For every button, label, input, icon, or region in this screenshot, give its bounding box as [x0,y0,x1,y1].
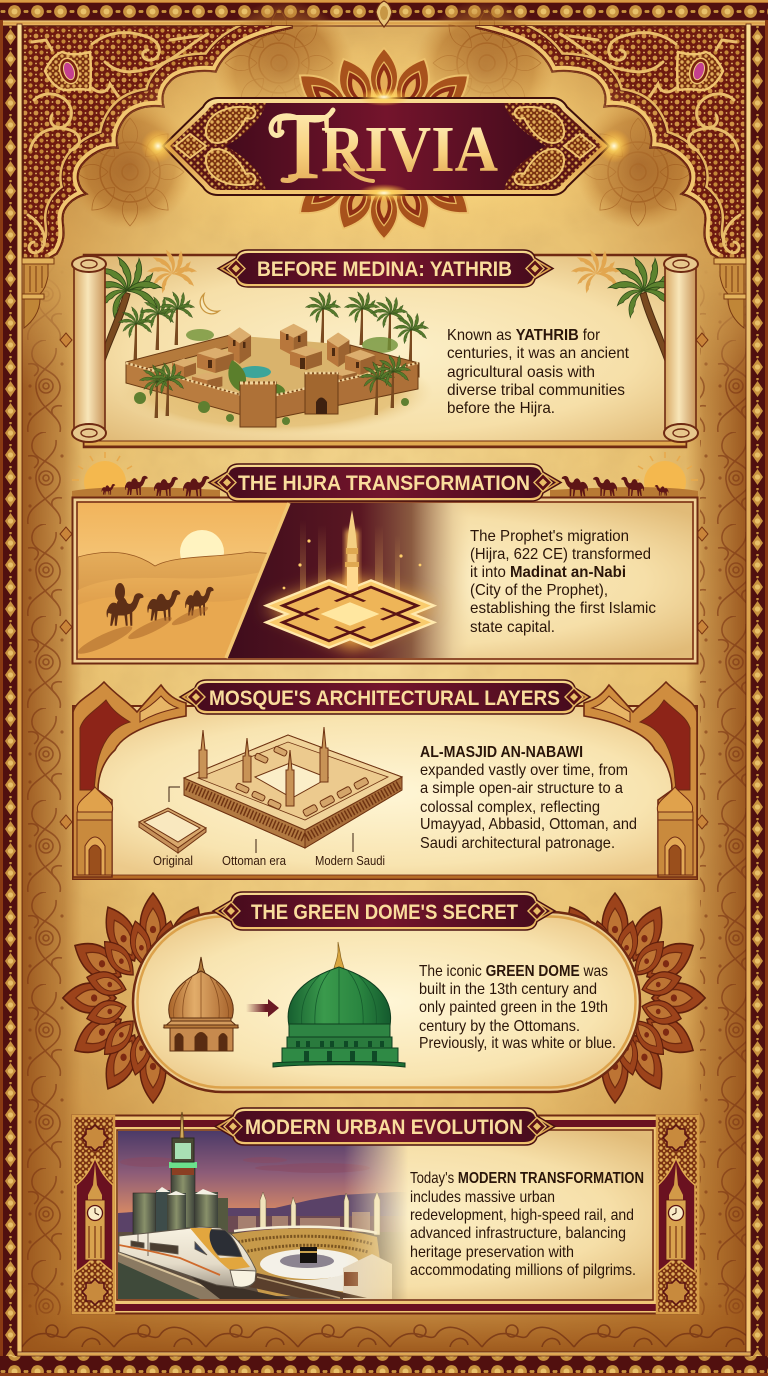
heading plaque: MODERN URBAN EVOLUTION [245,1116,523,1139]
side diamond markers [60,333,708,829]
text: mosque description: a simple open-air structure to a [420,780,623,797]
title banner [94,31,674,261]
heading plaque: THE HIJRA TRANSFORMATION [238,472,530,495]
text: Hijra description: it into Madinat an-Nabi [470,564,626,581]
title text [271,92,498,199]
title text: RIVIA [321,113,498,186]
text: Hijra description: The Prophet's migration [470,528,629,545]
text: modern transformation description: accommodating millions of pilgrims. [410,1262,636,1279]
text: mosque description: Umayyad, Abbasid, Ottoman, and [420,816,637,833]
text: green dome description: The iconic GREEN DOME was [419,963,608,980]
text: Yathrib description: agricultural oasis with [447,364,595,381]
text: mosque description [420,744,637,852]
heading plaque [218,250,553,287]
mountains [118,1192,404,1232]
text: Yathrib description: diverse tribal communities [447,382,625,399]
text: green dome description: Previously, it was white or blue. [419,1035,616,1052]
heading plaque [209,464,561,501]
heading plaque [213,892,555,930]
heading plaque: BEFORE MEDINA: YATHRIB [257,258,512,281]
scroll rollers [72,256,698,442]
leader lines [169,787,353,853]
suns and camel caravans [72,452,698,503]
right ornamental column [657,1116,698,1313]
text: Hijra description: (Hijra, 622 CE) transformed [470,546,651,563]
distant minarets and city [238,1212,370,1232]
heading plaque: MOSQUE'S ARCHITECTURAL LAYERS [209,687,560,710]
dark panel with glowing plan [226,503,470,658]
text: Hijra description: establishing the first Islamic [470,600,656,617]
clock tower spire [180,1112,184,1138]
faint mandalas behind the arch [66,0,702,229]
text: mosque description: expanded vastly over time, from [420,762,628,779]
text: Hijra description [470,528,656,636]
labels: Modern Saudi [315,853,385,868]
illustration: Makkah skyline, Kaaba and train [118,1131,408,1299]
text: Hijra description: state capital. [470,619,555,636]
text: Yathrib description: centuries, it was an ancient [447,345,630,362]
labels [153,853,385,868]
text: green dome description [419,963,616,1052]
fort buildings [172,324,375,390]
labels: Ottoman era [222,853,287,868]
heading plaque [180,680,590,714]
text: modern transformation description: advanced infrastructure, balancing [410,1225,626,1242]
text: modern transformation description: Today's MODERN TRANSFORMATION [410,1170,644,1187]
left ornamental column [73,1116,114,1313]
labels: Original [153,853,193,868]
ground behind [118,1232,408,1299]
text: green dome description: built in the 13th century and [419,981,597,998]
icon: green dome [273,942,405,1067]
paisley ornaments [175,107,595,185]
text: Yathrib description: Known as YATHRIB for [447,327,601,344]
lotus ornament above and below [269,48,499,239]
icon: palm trees [93,248,677,364]
arrow [246,999,279,1017]
panel: Hijra transformation [72,452,698,664]
icon: original brown dome [164,957,238,1051]
text: Yathrib description: before the Hijra. [447,400,555,417]
left arch with pavilion [73,682,186,877]
Grand Mosque and Kaaba [232,1227,392,1299]
tracks [118,1254,220,1299]
panel: before Medina [72,248,698,447]
illustration: desert caravan [75,503,293,660]
heading plaque: THE GREEN DOME'S SECRET [251,901,518,924]
illustration: walled oasis fort [113,291,433,436]
heading plaque [215,1108,555,1145]
icon: original small enclosure [139,808,206,853]
text: green dome description: century by the Ottomans. [419,1018,580,1035]
text: Yathrib description [447,327,630,417]
title text: T [276,92,330,199]
panel: modern urban evolution [72,1108,698,1314]
text: mosque description: AL-MASJID AN-NABAWI [420,744,583,761]
right arch with pavilion [584,682,697,877]
side mandalas [63,893,705,1103]
panel: green dome secret [63,892,705,1103]
text: Hijra description: (City of the Prophet), [470,582,608,599]
text: green dome description: only painted green in the 19th [419,999,608,1016]
text: modern transformation description [410,1170,644,1279]
bullet train [119,1227,256,1288]
left arch spandrel [22,26,292,328]
icon: isometric mosque complex [184,727,402,848]
icon: crescent moon [200,294,219,314]
text: mosque description: Saudi architectural patronage. [420,835,615,852]
text: modern transformation description: heritage preservation with [410,1244,574,1261]
text: modern transformation description: includes massive urban [410,1189,555,1206]
clock tower and towers [133,1138,228,1235]
icon: glowing mosque plan with minaret [245,510,455,656]
panel: mosque architectural layers [73,680,697,879]
text: mosque description: colossal complex, reflecting [420,799,600,816]
right arch spandrel [476,26,746,328]
text: modern transformation description: redevelopment, high-speed rail, and [410,1207,634,1224]
